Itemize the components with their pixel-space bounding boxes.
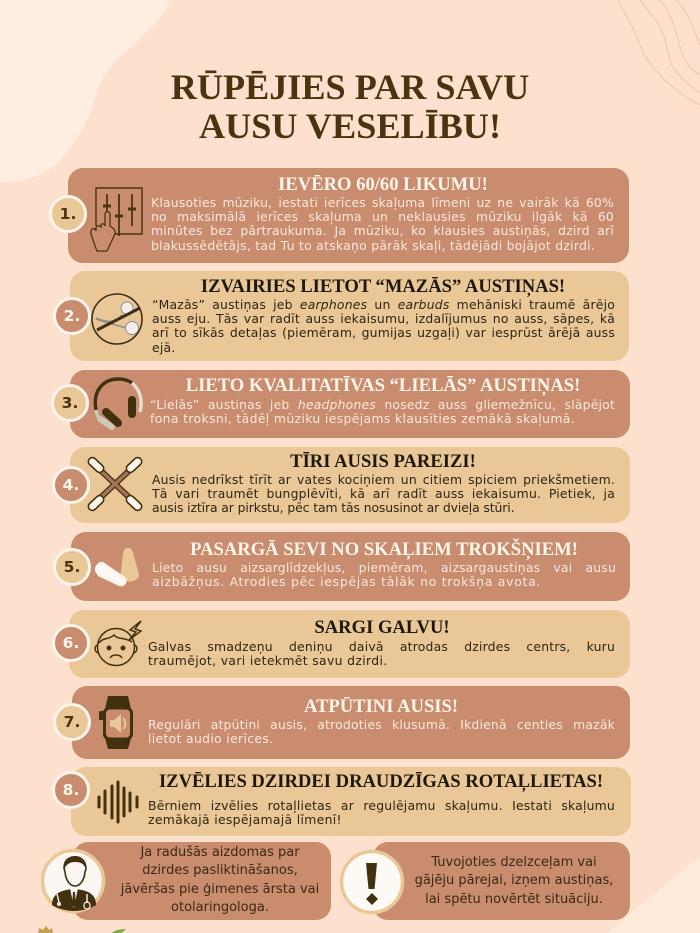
text 8: Bērniem izvēlies rotaļlietas ar regulējamu skaļumu. Iestati skaļumu bbox=[148, 798, 615, 813]
text 1 bbox=[151, 195, 614, 253]
heading 3: LIETO KVALITATĪVAS “LIELĀS” AUSTIŅAS! bbox=[186, 375, 580, 396]
text 7 bbox=[148, 717, 615, 746]
badge 1 bbox=[49, 195, 87, 233]
heading 1: IEVĒRO 60/60 LIKUMU! bbox=[278, 174, 488, 195]
panel: 3 bbox=[70, 370, 630, 438]
badge 4: 4. bbox=[63, 476, 79, 494]
text 7: lietot audio ierīces. bbox=[148, 731, 273, 746]
heading 6: SARGI GALVU! bbox=[314, 617, 450, 638]
heading 7: ATPŪTINI AUSIS! bbox=[304, 696, 458, 717]
note text left: otolaringologa. bbox=[171, 900, 269, 915]
text 4: Ausis nedrīkst tīrīt ar vates kociņiem un citiem spiciem priekšmetiem. bbox=[152, 472, 615, 487]
icon: ear plugs bbox=[94, 548, 139, 586]
note text right bbox=[415, 855, 613, 907]
text 5: aizbāžņus. Atrodies pēc iespējas tālāk no trokšņa avota. bbox=[152, 574, 541, 589]
badge 6 bbox=[52, 624, 90, 662]
panel: doctor note bbox=[73, 842, 331, 920]
icon: headphones bbox=[94, 377, 143, 430]
badge 3: 3. bbox=[62, 394, 78, 412]
text 2 bbox=[152, 297, 615, 355]
note text right: lai spētu novērtēt situāciju. bbox=[425, 892, 603, 907]
heading 2: IZVAIRIES LIETOT “MAZĀS” AUSTIŅAS! bbox=[201, 276, 565, 297]
note text left: jāvēršas pie ģimenes ārsta vai bbox=[121, 882, 319, 897]
text 6 bbox=[148, 639, 615, 668]
text 3: “Lielās” austiņas jeb headphones nosedz auss gliemežnīcu, slāpējot bbox=[150, 397, 615, 412]
text 6: traumējot, vari ietekmēt savu dzirdi. bbox=[148, 653, 388, 668]
badge 1: 1. bbox=[60, 205, 76, 223]
title: RŪPĒJIES PAR SAVU bbox=[171, 67, 529, 107]
text 1: no maksimālā ierīces skaļuma un neklausies mūziku ilgāk kā 60 bbox=[151, 209, 614, 224]
panel: 7 bbox=[72, 686, 630, 759]
text 6: Galvas smadzeņu deniņu daivā atrodas dzirdes centrs, kuru bbox=[148, 639, 615, 654]
badge 7 bbox=[53, 703, 91, 741]
icon: exclamation mark bbox=[340, 850, 404, 914]
panel: 1 bbox=[68, 168, 629, 263]
logos cropped at bottom edge bbox=[38, 926, 126, 933]
badge 5 bbox=[53, 548, 91, 586]
icon: head with lightning bbox=[94, 620, 142, 666]
icon: doctor bbox=[40, 848, 106, 914]
icon: sound wave bbox=[98, 780, 138, 824]
icon: smartwatch bbox=[99, 696, 133, 749]
text 8 bbox=[148, 798, 615, 827]
badge 7: 7. bbox=[64, 713, 80, 731]
note text left bbox=[120, 845, 319, 915]
text 2: auss eju. Tās var radīt auss iekaisumu, izdalījumus no auss, sāpes, kā bbox=[152, 311, 615, 326]
title bbox=[171, 67, 529, 146]
badge 8: 8. bbox=[63, 781, 79, 799]
text 8: zemākajā iespējamajā līmenī! bbox=[148, 812, 342, 827]
panel: 6 bbox=[69, 610, 630, 678]
text 4: ausis iztīra ar pirkstu, pēc tam tās nosusinot ar dvieļa stūri. bbox=[152, 500, 514, 515]
badge 4 bbox=[52, 466, 90, 504]
text 5 bbox=[152, 560, 616, 589]
text 2: arī to sīkās detaļas (piemēram, gumijas uzgaļi) var iesprūst ārējā auss bbox=[152, 325, 615, 340]
heading 8: IZVĒLIES DZIRDEI DRAUDZĪGAS ROTAĻLIETAS! bbox=[159, 771, 603, 792]
note text right: gājēju pārejai, izņem austiņas, bbox=[415, 873, 613, 888]
badge 8 bbox=[52, 771, 90, 809]
note text left: Ja radušās aizdomas par bbox=[140, 845, 300, 860]
badge 6: 6. bbox=[63, 634, 79, 652]
note text left: dzirdes pasliktināšanos, bbox=[142, 863, 298, 878]
text 1: minūtes bez pārtraukuma. Ja mūziku, ko klausies austiņās, dzird arī bbox=[151, 223, 614, 238]
icon: cotton swabs bbox=[88, 456, 142, 512]
title: AUSU VESELĪBU! bbox=[199, 106, 501, 146]
badge 3 bbox=[51, 384, 89, 422]
heading 4: TĪRI AUSIS PAREIZI! bbox=[290, 451, 476, 472]
text 4: Tā vari traumēt bungplēvīti, kā arī radīt auss iekaisumu. Pietiek, ja bbox=[152, 486, 615, 501]
badge 5: 5. bbox=[64, 558, 80, 576]
text 3: fona troksni, tādēļ mūziku iespējams klausīties zemākā skaļumā. bbox=[150, 411, 575, 426]
panel: 4 bbox=[70, 447, 630, 523]
text 2: ejā. bbox=[152, 340, 175, 355]
panel: 5 bbox=[71, 532, 630, 601]
panel: 8 bbox=[71, 767, 631, 836]
text 3 bbox=[150, 397, 615, 426]
heading 5: PASARGĀ SEVI NO SKAĻIEM TROKŠŅIEM! bbox=[190, 539, 578, 560]
panel: 2 bbox=[70, 271, 629, 361]
text 1: blakussēdētājs, tad Tu to atskaņo pārāk skaļi, tādējādi bojājot dzirdi. bbox=[151, 238, 595, 253]
badge 2 bbox=[53, 297, 91, 335]
text 5: Lieto ausu aizsarglīdzekļus, piemēram, aizsargaustiņas vai ausu bbox=[152, 560, 616, 575]
text 1: Klausoties mūziku, iestati ierīces skaļuma līmeni uz ne vairāk kā 60% bbox=[151, 195, 614, 210]
note text right: Tuvojoties dzelzceļam vai bbox=[431, 855, 597, 870]
panel: crossing note bbox=[373, 842, 630, 920]
text 7: Regulāri atpūtini ausis, atrodoties klusumā. Ikdienā centies mazāk bbox=[148, 717, 615, 732]
icon: no earphones bbox=[91, 293, 143, 345]
text 4 bbox=[152, 472, 615, 515]
icon: sliders and hand bbox=[90, 187, 143, 252]
text 2: “Mazās” austiņas jeb earphones un earbuds mehāniski traumē ārējo bbox=[152, 297, 615, 312]
badge 2: 2. bbox=[64, 307, 80, 325]
